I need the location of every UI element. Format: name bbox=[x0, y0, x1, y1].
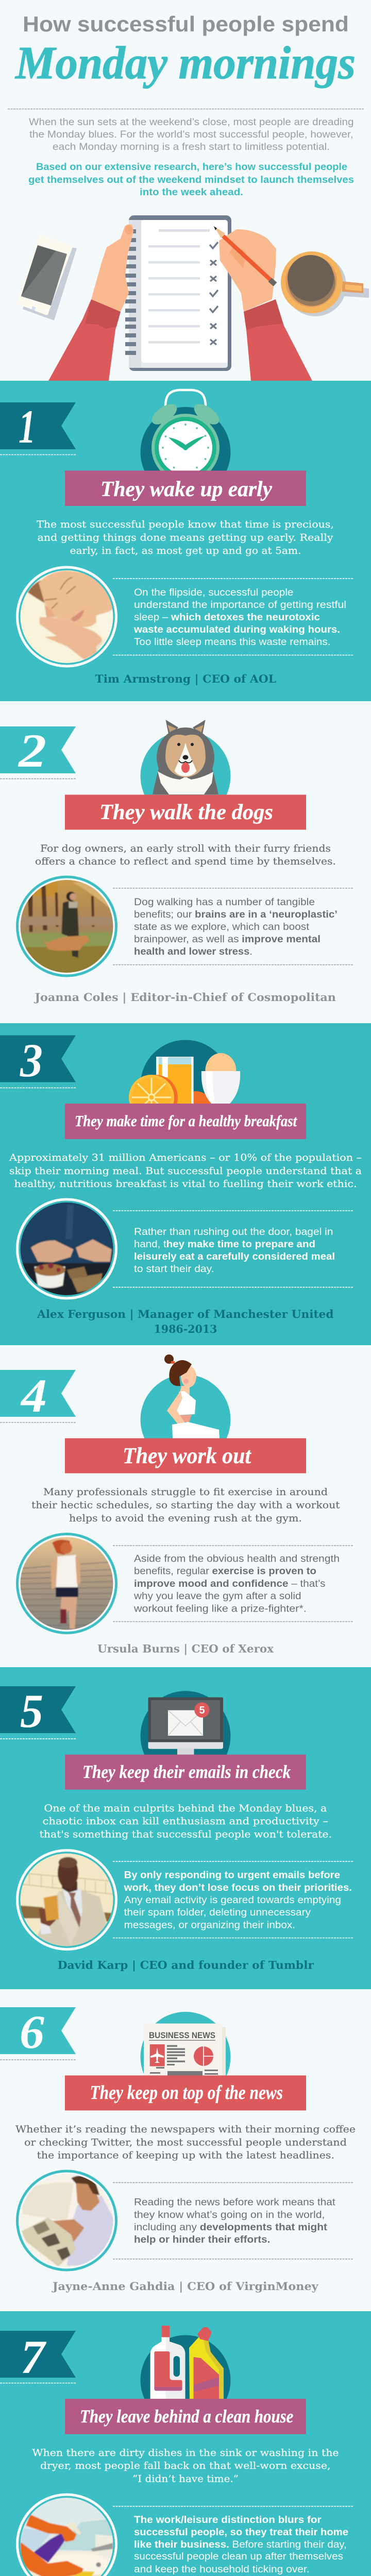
intro text: each Monday morning is a fresh start to limitless potential. bbox=[53, 142, 330, 152]
paragraph: waste accumulated during waking hours. bbox=[133, 624, 340, 635]
paragraph: understand the importance of getting restful bbox=[134, 600, 346, 611]
paragraph: workout feeling like a prize-fighter*. bbox=[133, 1603, 307, 1615]
body text: chaotic inbox can kill enthusiasm and productivity – bbox=[43, 1816, 328, 1827]
photo: man reading newspaper bbox=[18, 2171, 116, 2270]
banner: clean house: They leave behind a clean house bbox=[80, 2406, 293, 2427]
body text: offers a chance to reflect and spend time by themselves. bbox=[35, 856, 336, 867]
banner: they walk the dogs bbox=[65, 794, 306, 829]
paragraph: Any email activity is geared towards emptying bbox=[124, 1895, 341, 1906]
paragraph bbox=[134, 2197, 335, 2245]
paragraph: leisurely eat a carefully considered meal bbox=[134, 1251, 335, 1262]
banner: they work out bbox=[65, 1438, 306, 1473]
banner: clean house bbox=[65, 2399, 306, 2434]
paragraph: help or hinder their efforts. bbox=[134, 2234, 270, 2245]
body text: helps to avoid the evening rush at the gym. bbox=[69, 1513, 302, 1524]
panel: section 1 they wake up early bbox=[0, 381, 371, 701]
paragraph: messages, or organizing their inbox. bbox=[124, 1920, 295, 1931]
body text bbox=[9, 1152, 362, 1190]
ribbon: number 7 bbox=[0, 2331, 76, 2383]
body text bbox=[35, 843, 336, 867]
ribbon: number 2 bbox=[0, 724, 76, 777]
paragraph: Reading the news before work means that bbox=[134, 2197, 335, 2208]
icon: cleaning bottles bbox=[140, 2326, 231, 2426]
ribbon: number 1: 1 bbox=[19, 400, 36, 453]
icon: woman exercising bbox=[140, 1354, 231, 1465]
body text: the importance of keeping up with the latest headlines. bbox=[37, 2150, 334, 2161]
paragraph: Aside from the obvious health and strength bbox=[134, 1554, 340, 1565]
paragraph: successful people clean up after themselves bbox=[134, 2551, 343, 2562]
name: Ursula Burns | CEO of Xerox bbox=[97, 1642, 274, 1656]
banner: on top of the news: They keep on top of the news bbox=[90, 2082, 283, 2104]
ribbon: number 3: 3 bbox=[20, 1034, 43, 1087]
paragraph: improve mood and confidence – that’s bbox=[134, 1579, 326, 1589]
illustration: desk with notebook, hands, phone and coffee bbox=[19, 215, 369, 381]
ribbon: number 4: 4 bbox=[20, 1369, 47, 1422]
body text: healthy, nutritious breakfast is vital to fuelling their work ethic. bbox=[14, 1178, 357, 1190]
body text: Approximately 31 million Americans – or 10% of the population – bbox=[9, 1152, 362, 1163]
paragraph bbox=[134, 1227, 335, 1275]
banner: they walk the dogs: They walk the dogs bbox=[99, 801, 273, 824]
title bbox=[14, 12, 356, 89]
paragraph: to start their day. bbox=[134, 1264, 214, 1275]
body text: their hectic schedules, so starting the day with a workout bbox=[31, 1500, 340, 1511]
icon: alarm clock bbox=[140, 390, 231, 497]
paragraph: brainpower, as well as improve mental bbox=[134, 934, 321, 945]
photo: man eating breakfast bbox=[18, 1199, 116, 1298]
ribbon: number 6: 6 bbox=[20, 2006, 44, 2058]
paragraph: Dog walking has a number of tangible bbox=[134, 897, 315, 908]
banner: on top of the news bbox=[65, 2075, 306, 2110]
photo: woman running up stairs bbox=[18, 1534, 116, 1633]
icon: notebook bbox=[125, 215, 231, 371]
icon: left arm and hand bbox=[48, 224, 133, 381]
ribbon: number 4 bbox=[0, 1369, 76, 1422]
name: Jayne-Anne Gahdia | CEO of VirginMoney bbox=[52, 2280, 318, 2293]
paragraph: health and lower stress . bbox=[134, 946, 252, 957]
paragraph: Rather than rushing out the door, bagel in bbox=[134, 1227, 333, 1238]
paragraph bbox=[133, 587, 346, 648]
name: Tim Armstrong | CEO of AOL bbox=[95, 673, 276, 686]
intro highlight: into the week ahead. bbox=[140, 187, 243, 198]
name: David Karp | CEO and founder of Tumblr bbox=[58, 1959, 314, 1972]
ribbon: number 2: 2 bbox=[18, 724, 46, 777]
banner: emails in check bbox=[65, 1755, 306, 1790]
panel: section 4 they work out bbox=[0, 1354, 353, 1656]
icon: monitor with email bbox=[140, 1691, 231, 1781]
body text: that's something that successful people won't tolerate. bbox=[40, 1829, 332, 1840]
body text: Whether it’s reading the newspapers with their morning coffee bbox=[15, 2124, 356, 2135]
paragraph bbox=[124, 1870, 352, 1931]
icon: coffee cup bbox=[281, 251, 369, 316]
body text: or checking Twitter, the most successful people understand bbox=[24, 2137, 347, 2148]
banner: they work out: They work out bbox=[123, 1443, 252, 1468]
intro highlight: get themselves out of the weekend mindset to launch themselves bbox=[28, 175, 354, 185]
intro highlight bbox=[28, 162, 354, 198]
name: Joanna Coles | Editor-in-Chief of Cosmopolitan bbox=[33, 991, 336, 1004]
paragraph: and keep the household ticking over. bbox=[134, 2564, 310, 2575]
body text: For dog owners, an early stroll with their furry friends bbox=[40, 843, 331, 854]
panel: section 7 clean house bbox=[0, 2311, 371, 2576]
ribbon: number 6 bbox=[0, 2006, 76, 2058]
paragraph: hand, they make time to prepare and bbox=[134, 1239, 315, 1250]
body text: dryer, most people fall back on that well-worn excuse, bbox=[40, 2460, 331, 2471]
body text: The most successful people know that time is precious, bbox=[37, 519, 334, 530]
paragraph: they know what’s going on in the world, bbox=[134, 2210, 325, 2221]
paragraph: sleep – which detoxes the neurotoxic bbox=[134, 612, 320, 623]
banner: healthy breakfast: They make time for a healthy breakfast bbox=[75, 1112, 297, 1130]
paragraph: The work/leisure distinction blurs for bbox=[134, 2515, 322, 2526]
paragraph: like their business. Before starting their day, bbox=[134, 2539, 347, 2550]
body text: One of the main culprits behind the Monday blues, a bbox=[44, 1803, 327, 1814]
heading: monday mornings: Monday mornings bbox=[14, 38, 356, 89]
body text: When there are dirty dishes in the sink or washing in the bbox=[32, 2447, 339, 2459]
photo: woman sleeping bbox=[18, 567, 116, 666]
panel: section 3 healthy breakfast bbox=[0, 1023, 371, 1345]
name: Alex Ferguson | Manager of Manchester United bbox=[37, 1308, 334, 1321]
icon: newspaper: BUSINESS NEWS bbox=[149, 2030, 215, 2040]
banner: healthy breakfast bbox=[65, 1104, 306, 1139]
paragraph: benefits; our brains are in a ‘neuroplastic’ bbox=[134, 909, 338, 920]
icon: dog bbox=[140, 720, 231, 821]
icon: phone bbox=[19, 236, 77, 320]
paragraph: state as we explore, which can boost bbox=[134, 922, 310, 933]
paragraph bbox=[134, 2515, 348, 2575]
body text: skip their morning meal. But successful people understand that a bbox=[9, 1165, 362, 1177]
name: 1986-2013 bbox=[154, 1323, 217, 1336]
intro text: When the sun sets at the weekend’s close, most people are dreading bbox=[29, 117, 353, 128]
body text: and getting things done means getting up early. Really bbox=[37, 532, 333, 543]
name bbox=[37, 1308, 334, 1336]
body text bbox=[40, 1803, 332, 1840]
body text: Many professionals struggle to fit exercise in around bbox=[43, 1486, 328, 1498]
ribbon: number 5: 5 bbox=[20, 1685, 43, 1737]
paragraph bbox=[134, 897, 338, 957]
ribbon: number 5 bbox=[0, 1685, 76, 1737]
body text bbox=[37, 519, 334, 556]
body text bbox=[32, 2447, 339, 2485]
panel: section 6 on top of the news bbox=[0, 2006, 356, 2293]
panel: section 5 emails in check bbox=[0, 1667, 371, 1989]
paragraph: including any developments that might bbox=[134, 2222, 328, 2233]
banner: emails in check: They keep their emails in check bbox=[82, 1761, 291, 1782]
photo: man with phone bbox=[18, 1851, 116, 1950]
paragraph: successful people, so they treat their home bbox=[134, 2527, 348, 2538]
banner: they wake up early: They wake up early bbox=[100, 478, 272, 501]
icon: right arm, hand and pencil bbox=[214, 226, 312, 381]
photo: woman walking dog in park bbox=[18, 877, 116, 976]
body text bbox=[15, 2124, 356, 2161]
intro text bbox=[29, 117, 353, 152]
paragraph bbox=[133, 1554, 340, 1615]
ribbon: number 7: 7 bbox=[21, 2331, 47, 2383]
intro highlight: Based on our extensive research, here’s how successful people bbox=[36, 162, 347, 173]
body text: early, in fact, as most get up and go at 5am. bbox=[70, 545, 301, 556]
paragraph: By only responding to urgent emails before bbox=[124, 1870, 340, 1881]
icon: monitor with email: 5 bbox=[199, 1705, 205, 1716]
paragraph: benefits, regular exercise is proven to bbox=[134, 1566, 316, 1577]
icon: newspaper bbox=[140, 2012, 231, 2102]
heading: how successful people spend: How successful people spend bbox=[23, 12, 349, 36]
body text: “I didn’t have time.” bbox=[132, 2473, 239, 2485]
paragraph: Too little sleep means this waste remains. bbox=[134, 637, 331, 648]
paragraph: their spam folder, deleting unnecessary bbox=[124, 1907, 311, 1918]
ribbon: number 1 bbox=[0, 400, 76, 453]
photo: cleaning a sink bbox=[18, 2495, 116, 2576]
paragraph: On the flipside, successful people bbox=[134, 587, 294, 598]
body text bbox=[31, 1486, 340, 1524]
paragraph: why you leave the gym after a solid bbox=[133, 1591, 301, 1602]
panel: section 2 they walk the dogs bbox=[0, 720, 353, 1004]
banner: they wake up early bbox=[65, 470, 306, 506]
ribbon: number 3 bbox=[0, 1034, 76, 1087]
intro text: the Monday blues. For the world’s most successful people, however, bbox=[29, 129, 353, 140]
icon: breakfast bbox=[129, 1040, 240, 1130]
paragraph: work, they don’t lose focus on their priorities. bbox=[124, 1883, 352, 1893]
